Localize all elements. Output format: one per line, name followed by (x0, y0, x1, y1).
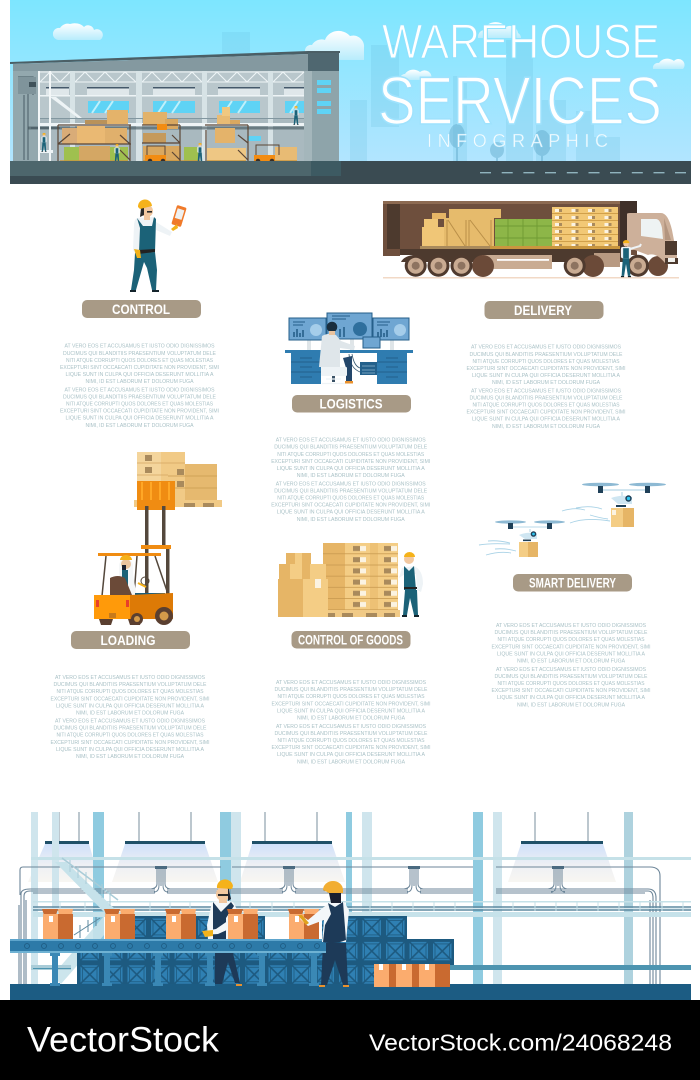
text block: loading: EXCEPTURI SINT OCCAECATI CUPIDITATE NON PROVIDENT, SIMI (50, 696, 210, 702)
heading: smart delivery: SMART DELIVERY (529, 576, 616, 590)
text block: smart delivery: DUCIMUS QUI BLANDITIIS PRAESENTIUM VOLUPTATUM DELE (494, 674, 648, 680)
conveyor belt (10, 939, 326, 986)
windows (88, 80, 331, 141)
panel: header background (10, 0, 691, 162)
text block: control of goods: AT VERO EOS ET ACCUSAMUS ET IUSTO ODIO DIGNISSIMOS (276, 680, 426, 686)
text block: loading: LIQUE SUNT IN CULPA QUI OFFICIA DESERUNT MOLLITIA A (56, 703, 204, 709)
text block: logistics: EXCEPTURI SINT OCCAECATI CUPIDITATE NON PROVIDENT, SIMI (271, 503, 430, 509)
text block: smart delivery: EXCEPTURI SINT OCCAECATI CUPIDITATE NON PROVIDENT, SIMI (492, 644, 650, 650)
text block: smart delivery: LIQUE SUNT IN CULPA QUI OFFICIA DESERUNT MOLLITIA A (497, 651, 645, 657)
text block: delivery: AT VERO EOS ET ACCUSAMUS ET IUSTO ODIO DIGNISSIMOS (471, 345, 621, 351)
text block: loading: AT VERO EOS ET ACCUSAMUS ET IUSTO ODIO DIGNISSIMOS (55, 675, 205, 681)
icon: delivery drones (479, 483, 666, 557)
columns (31, 812, 502, 988)
text block: logistics: NITI ATQUE CORRUPTI QUOS DOLORES ET QUAS MOLESTIAS (277, 452, 425, 458)
roof trusses (40, 72, 304, 82)
text block: loading (50, 675, 210, 760)
text block: control of goods: LIQUE SUNT IN CULPA QUI OFFICIA DESERUNT MOLLITIA A (277, 708, 425, 714)
floor boxes (374, 964, 450, 987)
text block: loading: NIMI, ID EST LABORUM ET DOLORUM FUGA (76, 754, 184, 760)
heading: control (82, 300, 201, 318)
text block: delivery: NITI ATQUE CORRUPTI QUOS DOLORES ET QUAS MOLESTIAS (472, 359, 620, 365)
text block: smart delivery: AT VERO EOS ET ACCUSAMUS ET IUSTO ODIO DIGNISSIMOS (496, 623, 646, 629)
text block: smart delivery: NITI ATQUE CORRUPTI QUOS DOLORES ET QUAS MOLESTIAS (498, 637, 645, 643)
text block: loading: NITI ATQUE CORRUPTI QUOS DOLORES ET QUAS MOLESTIAS (56, 689, 204, 695)
text block: delivery: EXCEPTURI SINT OCCAECATI CUPIDITATE NON PROVIDENT, SIMI (466, 366, 626, 372)
text block: control of goods: NITI ATQUE CORRUPTI QUOS DOLORES ET QUAS MOLESTIAS (278, 738, 425, 744)
icon: forklift (94, 452, 222, 625)
crate stacks (135, 916, 265, 939)
text block: loading: AT VERO EOS ET ACCUSAMUS ET IUSTO ODIO DIGNISSIMOS (55, 718, 205, 724)
text block: control: NITI ATQUE CORRUPTI QUOS DOLORES ET QUAS MOLESTIAS (66, 402, 213, 408)
text block: control: AT VERO EOS ET ACCUSAMUS ET IUSTO ODIO DIGNISSIMOS (64, 387, 215, 393)
panel: watermark footer: VectorStock.com/24068248 (369, 1030, 672, 1056)
columns (70, 71, 273, 162)
heading: delivery (484, 301, 604, 319)
worker two legs (321, 943, 348, 985)
heading: control: CONTROL (112, 302, 170, 317)
text block: logistics: NIMI, ID EST LABORUM ET DOLORUM FUGA (297, 517, 405, 523)
city skyline (222, 32, 620, 162)
text block: smart delivery: LIQUE SUNT IN CULPA QUI OFFICIA DESERUNT MOLLITIA A (497, 695, 645, 701)
text block: logistics: NITI ATQUE CORRUPTI QUOS DOLORES ET QUAS MOLESTIAS (277, 496, 425, 502)
text block: delivery: EXCEPTURI SINT OCCAECATI CUPIDITATE NON PROVIDENT, SIMI (466, 410, 626, 416)
text block: smart delivery: NITI ATQUE CORRUPTI QUOS DOLORES ET QUAS MOLESTIAS (498, 681, 645, 687)
heading: smart delivery (513, 574, 632, 592)
road (10, 161, 691, 184)
text block: logistics: NIMI, ID EST LABORUM ET DOLORUM FUGA (297, 473, 405, 479)
text block: logistics: LIQUE SUNT IN CULPA QUI OFFICIA DESERUNT MOLLITIA A (277, 466, 425, 472)
text block: loading: NITI ATQUE CORRUPTI QUOS DOLORES ET QUAS MOLESTIAS (56, 733, 204, 739)
heading: delivery: DELIVERY (514, 303, 572, 318)
text block: control of goods: DUCIMUS QUI BLANDITIIS PRAESENTIUM VOLUPTATUM DELE (274, 731, 428, 737)
heading: control of goods: CONTROL OF GOODS (298, 632, 403, 648)
worker two (298, 881, 349, 943)
text block: loading: DUCIMUS QUI BLANDITIIS PRAESENTIUM VOLUPTATUM DELE (54, 682, 207, 688)
text block: smart delivery: NIMI, ID EST LABORUM ET DOLORUM FUGA (517, 658, 625, 664)
title: INFOGRAPHIC (427, 131, 608, 151)
text block: smart delivery: DUCIMUS QUI BLANDITIIS PRAESENTIUM VOLUPTATUM DELE (494, 630, 648, 636)
panel: watermark footer: VectorStock (27, 1020, 220, 1060)
heading: control of goods (292, 631, 410, 648)
text block: delivery (466, 345, 626, 430)
trees (449, 124, 551, 161)
title (378, 16, 662, 151)
text block: control of goods: DUCIMUS QUI BLANDITIIS PRAESENTIUM VOLUPTATUM DELE (274, 687, 428, 693)
text block: control of goods: NIMI, ID EST LABORUM ET DOLORUM FUGA (297, 716, 405, 722)
icon: logistics control desk (285, 313, 413, 384)
chassis (482, 255, 552, 269)
panel: warehouse conveyor scene (10, 812, 691, 1000)
text block: logistics: AT VERO EOS ET ACCUSAMUS ET IUSTO ODIO DIGNISSIMOS (276, 481, 426, 487)
heading: loading: LOADING (100, 633, 156, 648)
icon: control worker (130, 199, 187, 292)
text block: loading: EXCEPTURI SINT OCCAECATI CUPIDITATE NON PROVIDENT, SIMI (50, 740, 210, 746)
text block: control of goods: NITI ATQUE CORRUPTI QUOS DOLORES ET QUAS MOLESTIAS (278, 694, 425, 700)
text block: loading: NIMI, ID EST LABORUM ET DOLORUM FUGA (76, 710, 184, 716)
title: WAREHOUSE (382, 16, 660, 69)
floor (10, 984, 691, 1000)
text block: control: NIMI, ID EST LABORUM ET DOLORUM FUGA (86, 379, 194, 385)
text block: control of goods: EXCEPTURI SINT OCCAECATI CUPIDITATE NON PROVIDENT, SIMI (272, 701, 430, 707)
text block: control: LIQUE SUNT IN CULPA QUI OFFICIA DESERUNT MOLLITIA A (66, 372, 214, 378)
worker one legs (215, 953, 240, 984)
cab (627, 213, 677, 263)
icon: delivery truck (383, 201, 679, 278)
text block: delivery: AT VERO EOS ET ACCUSAMUS ET IUSTO ODIO DIGNISSIMOS (471, 388, 621, 394)
text block: delivery: NIMI, ID EST LABORUM ET DOLORUM FUGA (492, 380, 600, 386)
text block: loading: DUCIMUS QUI BLANDITIIS PRAESENTIUM VOLUPTATUM DELE (54, 726, 207, 732)
text block: control: LIQUE SUNT IN CULPA QUI OFFICIA DESERUNT MOLLITIA A (66, 416, 214, 422)
panel: watermark footer (0, 1000, 700, 1080)
text block: control: AT VERO EOS ET ACCUSAMUS ET IUSTO ODIO DIGNISSIMOS (64, 344, 215, 350)
hanging lights (28, 812, 616, 882)
heading: logistics: LOGISTICS (320, 396, 382, 412)
warehouse building (10, 51, 341, 176)
clouds (53, 23, 103, 40)
text block: delivery: LIQUE SUNT IN CULPA QUI OFFICIA DESERUNT MOLLITIA A (472, 417, 620, 423)
text block: control of goods: NIMI, ID EST LABORUM ET DOLORUM FUGA (297, 759, 405, 765)
open boxes on conveyor (42, 909, 319, 939)
heading: loading (71, 631, 190, 649)
text block: smart delivery: EXCEPTURI SINT OCCAECATI CUPIDITATE NON PROVIDENT, SIMI (492, 688, 650, 694)
text block: control: EXCEPTURI SINT OCCAECATI CUPIDITATE NON PROVIDENT, SIMI (60, 365, 219, 371)
mezzanine with railing (33, 901, 691, 917)
text block: control: DUCIMUS QUI BLANDITIIS PRAESENTIUM VOLUPTATUM DELE (63, 351, 216, 357)
text block: control: NITI ATQUE CORRUPTI QUOS DOLORES ET QUAS MOLESTIAS (66, 358, 213, 364)
text block: control: NIMI, ID EST LABORUM ET DOLORUM FUGA (86, 423, 194, 429)
text block: control of goods: LIQUE SUNT IN CULPA QUI OFFICIA DESERUNT MOLLITIA A (277, 752, 425, 758)
text block: logistics: LIQUE SUNT IN CULPA QUI OFFICIA DESERUNT MOLLITIA A (277, 510, 425, 516)
tiny workers (41, 133, 47, 152)
icon: stacked goods with worker (278, 543, 423, 617)
text block: logistics: EXCEPTURI SINT OCCAECATI CUPIDITATE NON PROVIDENT, SIMI (271, 459, 430, 465)
text block: logistics (271, 438, 430, 523)
text block: logistics: DUCIMUS QUI BLANDITIIS PRAESENTIUM VOLUPTATUM DELE (274, 445, 428, 451)
heading: logistics (292, 395, 411, 412)
shelving goods (60, 107, 297, 161)
text block: delivery: DUCIMUS QUI BLANDITIIS PRAESENTIUM VOLUPTATUM DELE (470, 352, 623, 358)
text block: delivery: NITI ATQUE CORRUPTI QUOS DOLORES ET QUAS MOLESTIAS (472, 402, 620, 408)
text block: smart delivery: AT VERO EOS ET ACCUSAMUS ET IUSTO ODIO DIGNISSIMOS (496, 667, 646, 673)
text block: control: EXCEPTURI SINT OCCAECATI CUPIDITATE NON PROVIDENT, SIMI (60, 409, 219, 415)
mezzanine (38, 123, 304, 126)
text block: control of goods (272, 680, 430, 765)
text block: smart delivery (492, 623, 650, 708)
small forklifts (145, 124, 275, 162)
text block: loading: LIQUE SUNT IN CULPA QUI OFFICIA DESERUNT MOLLITIA A (56, 747, 204, 753)
text block: delivery: DUCIMUS QUI BLANDITIIS PRAESENTIUM VOLUPTATUM DELE (470, 395, 623, 401)
text block: control: DUCIMUS QUI BLANDITIIS PRAESENTIUM VOLUPTATUM DELE (63, 394, 216, 400)
text block: control (60, 344, 219, 429)
text block: delivery: NIMI, ID EST LABORUM ET DOLORUM FUGA (492, 424, 600, 430)
text block: smart delivery: NIMI, ID EST LABORUM ET DOLORUM FUGA (517, 702, 625, 708)
staircase (31, 858, 118, 984)
text block: control of goods: EXCEPTURI SINT OCCAECATI CUPIDITATE NON PROVIDENT, SIMI (272, 745, 430, 751)
text block: logistics: DUCIMUS QUI BLANDITIIS PRAESENTIUM VOLUPTATUM DELE (274, 488, 428, 494)
beam and pipes (31, 857, 691, 860)
text block: logistics: AT VERO EOS ET ACCUSAMUS ET IUSTO ODIO DIGNISSIMOS (276, 438, 426, 444)
text block: delivery: LIQUE SUNT IN CULPA QUI OFFICIA DESERUNT MOLLITIA A (472, 373, 620, 379)
ceiling lights (46, 88, 304, 95)
cargo (422, 227, 444, 248)
worker one (202, 879, 238, 940)
pipes left (18, 77, 60, 160)
text block: control of goods: AT VERO EOS ET ACCUSAMUS ET IUSTO ODIO DIGNISSIMOS (276, 724, 426, 730)
